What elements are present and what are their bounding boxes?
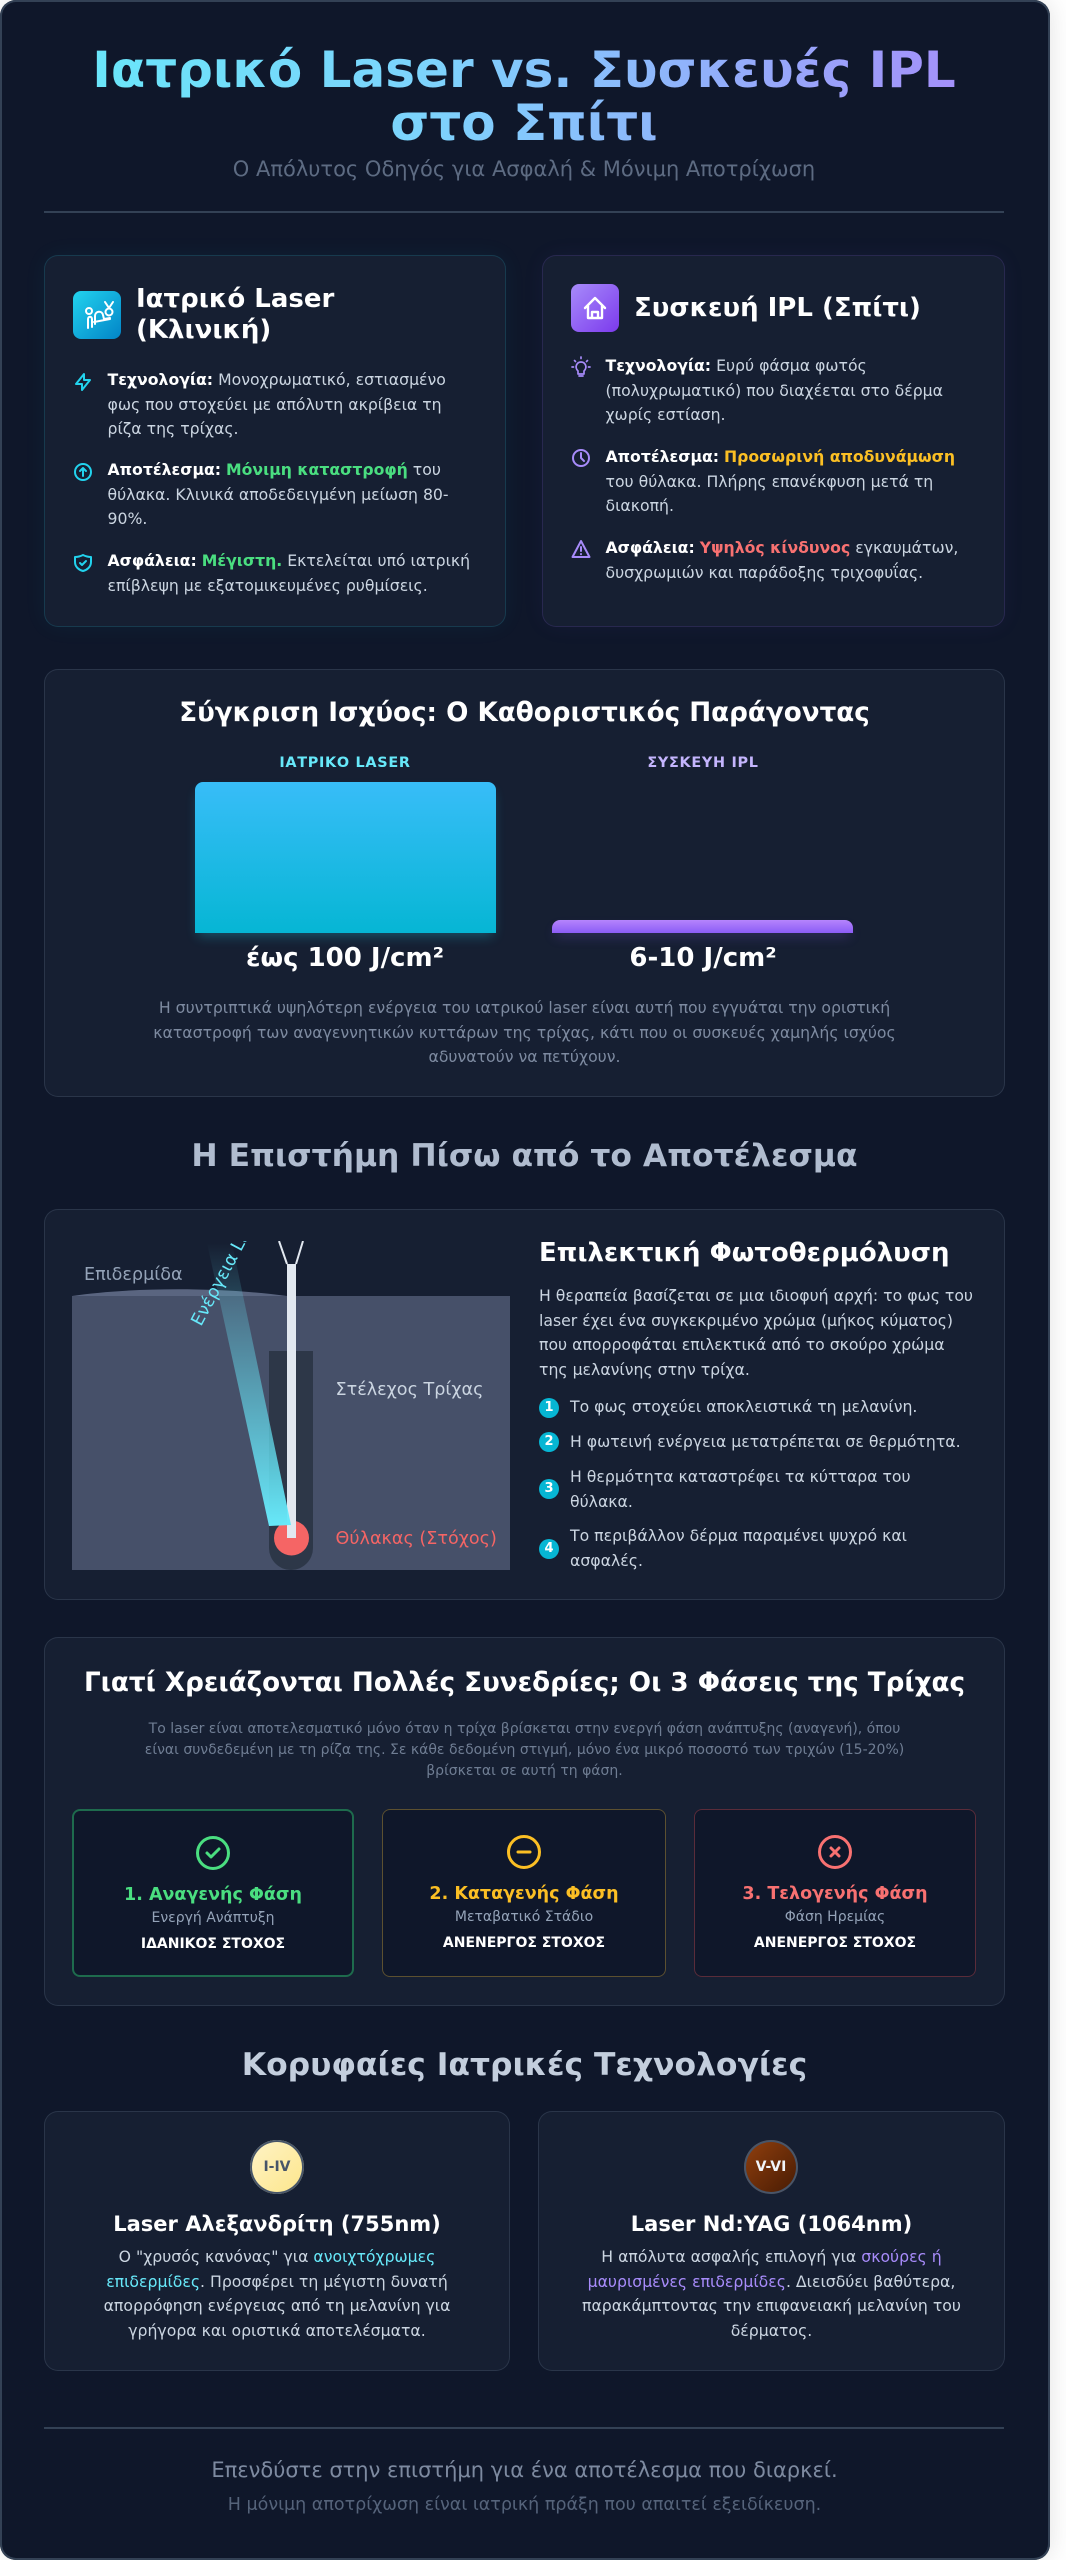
intro text: Το laser είναι αποτελεσματικό μόνο όταν η τρίχα βρίσκεται στην ενεργή φάση ανάπτυξης (αναγενή), όπου [149, 1721, 900, 1737]
step 3 text [570, 1467, 911, 1510]
item: safety: επίβλεψη με εξατομικευμένες ρυθμίσεις. [108, 576, 428, 594]
value: laser: έως 100 J/cm² [246, 943, 444, 973]
icon: bulb [571, 356, 591, 377]
skin badge: I-IV [263, 2159, 291, 2175]
description: παρακάμπτοντας την επιφανειακή μελανίνη του [582, 2296, 961, 2315]
step 1 badge: 1 [544, 1400, 554, 1415]
steps list [539, 1397, 961, 1570]
title: Laser Αλεξανδρίτη (755nm) [113, 2212, 441, 2236]
step 4 text [570, 1526, 907, 1570]
item: safety: Ασφάλεια: Μέγιστη. Εκτελείται υπό ιατρική [108, 551, 470, 570]
skin badge [250, 2140, 304, 2194]
skin [72, 1296, 510, 1570]
phase title: 3. Τελογενής Φάση [742, 1884, 928, 1904]
label: epidermis: Επιδερμίδα [84, 1265, 183, 1285]
skin badge: V-VI [756, 2159, 786, 2175]
step 2 badge: 2 [544, 1434, 554, 1449]
description: επιδερμίδες. Προσφέρει τη μέγιστη δυνατή [106, 2272, 448, 2290]
item: technology [108, 370, 446, 438]
step 3 badge: 3 [544, 1481, 554, 1496]
phase subtitle: Φάση Ηρεμίας [785, 1909, 885, 1925]
heading: Σύγκριση Ισχύος: Ο Καθοριστικός Παράγοντας [179, 698, 870, 728]
hair shaft [287, 1264, 296, 1538]
item: result [108, 460, 449, 528]
panel: medical laser [44, 255, 506, 627]
subtitle: Ο Απόλυτος Οδηγός για Ασφαλή & Μόνιμη Αποτρίχωση [233, 157, 815, 181]
item: result: Αποτέλεσμα: Μόνιμη καταστροφή του [108, 460, 441, 479]
label: laser: ΙΑΤΡΙΚΟ LASER [279, 755, 411, 771]
phase subtitle: Μεταβατικό Στάδιο [455, 1909, 593, 1925]
footer line: Επενδύστε στην επιστήμη για ένα αποτέλεσμα που διαρκεί. [211, 2458, 838, 2482]
title: στο Σπίτι [390, 94, 658, 152]
title: Ιατρικό Laser vs. Συσκευές IPL [92, 41, 956, 99]
icon: cross [818, 1835, 852, 1869]
step 4 text: ασφαλές. [570, 1550, 643, 1570]
heading: science: Η Επιστήμη Πίσω από το Αποτέλεσμα [191, 1138, 858, 1174]
description: Ο "χρυσός κανόνας" για ανοιχτόχρωμες [119, 2247, 435, 2266]
bar: ipl [552, 920, 853, 933]
item: technology: Τεχνολογία: Ευρύ φάσμα φωτός [606, 356, 867, 375]
explanation: Η συντριπτικά υψηλότερη ενέργεια του ιατρικού laser είναι αυτή που εγγυάται την οριστική [159, 998, 890, 1017]
panel: power comparison [44, 669, 1005, 1097]
heading: Ιατρικό Laser [136, 284, 334, 314]
intro text: είναι συνδεδεμένη με τη ρίζα της. Σε κάθε δεδομένη στιγμή, μόνο ένα μικρό ποσοστό των τριχών (15-20%) [145, 1742, 904, 1758]
item: technology: χωρίς εστίαση. [606, 405, 726, 424]
phase 2 card [382, 1809, 666, 1977]
icon: minus [507, 1835, 541, 1869]
intro text [145, 1721, 904, 1779]
explanation: καταστροφή των αναγεννητικών κυττάρων της τρίχας, κάτι που οι συσκευές χαμηλής ισχύος [153, 1022, 896, 1042]
heading: (Κλινική) [136, 315, 271, 345]
step 2 text: Η φωτεινή ενέργεια μετατρέπεται σε θερμότητα. [570, 1432, 961, 1451]
phase status: ΑΝΕΝΕΡΓΟΣ ΣΤΟΧΟΣ [443, 1935, 605, 1951]
label: ipl: ΣΥΣΚΕΥΗ IPL [647, 755, 759, 771]
phase status: ΙΔΑΝΙΚΟΣ ΣΤΟΧΟΣ [141, 1936, 285, 1952]
step 3 badge [539, 1479, 559, 1499]
title: Laser Nd:YAG (1064nm) [631, 2212, 912, 2236]
description: Η απόλυτα ασφαλής επιλογή για σκούρες ή [601, 2247, 942, 2266]
phase status: ΑΝΕΝΕΡΓΟΣ ΣΤΟΧΟΣ [754, 1935, 916, 1951]
icon: shield [74, 554, 92, 572]
footer note: Η μόνιμη αποτρίχωση είναι ιατρική πράξη που απαιτεί εξειδίκευση. [228, 2495, 821, 2515]
follicle [269, 1351, 313, 1570]
description: γρήγορα και οριστικά αποτελέσματα. [128, 2320, 426, 2340]
explanation [153, 998, 896, 1066]
panel: hair phases [44, 1637, 1005, 2006]
icon: check [196, 1836, 230, 1870]
target bulb [274, 1520, 309, 1556]
heading: technologies: Κορυφαίες Ιατρικές Τεχνολογίες [242, 2047, 807, 2083]
phase 1 card [72, 1809, 354, 1977]
item: result: θύλακα. Κλινικά αποδεδειγμένη μείωση 80- [108, 484, 449, 504]
heading: Συσκευή IPL (Σπίτι) [634, 293, 921, 323]
item: technology: φως που στοχεύει με απόλυτη ακρίβεια τη [108, 394, 442, 414]
heading: Γιατί Χρειάζονται Πολλές Συνεδρίες; Οι 3 Φάσεις της Τρίχας [84, 1668, 965, 1698]
phase title: 1. Αναγενής Φάση [124, 1885, 302, 1905]
label: shaft: Στέλεχος Τρίχας [336, 1380, 483, 1400]
item: safety [606, 538, 958, 582]
panel: selective photothermolysis [44, 1209, 1005, 1600]
description: μαυρισμένες επιδερμίδες. Διεισδύει βαθύτερα, [588, 2272, 955, 2290]
panel: Nd:YAG [538, 2111, 1005, 2371]
item: technology: (πολυχρωματικό) που διαχέεται στο δέρμα [606, 380, 943, 400]
value: ipl: 6-10 J/cm² [629, 943, 777, 973]
text block: Η θεραπεία βασίζεται σε μια ιδιοφυή αρχή: το φως του [539, 1286, 973, 1305]
item: technology: ρίζα της τρίχας. [108, 419, 239, 438]
skin badge [744, 2140, 798, 2194]
item: result: διακοπή. [606, 496, 674, 515]
item: result: Αποτέλεσμα: Προσωρινή αποδυνάμωση [606, 447, 955, 466]
step 3 text: θύλακα. [570, 1492, 633, 1510]
panel: alexandrite [44, 2111, 510, 2371]
bar: laser [194, 782, 496, 933]
icon: clock [572, 449, 590, 467]
text block: που απορροφάται επιλεκτικά από το σκούρο χρώμα [539, 1335, 945, 1354]
phase subtitle: Ενεργή Ανάπτυξη [152, 1910, 274, 1926]
hair tip [279, 1241, 303, 1264]
icon: house [571, 284, 619, 332]
intro text: βρίσκεται σε αυτή τη φάση. [426, 1763, 623, 1779]
heading [136, 284, 334, 345]
item: technology: Τεχνολογία: Μονοχρωματικό, εστιασμένο [108, 370, 446, 389]
label: follicle: Θύλακας (Στόχος) [336, 1529, 497, 1549]
step 1 badge [539, 1398, 559, 1418]
text block: της μελανίνης στην τρίχα. [539, 1360, 750, 1378]
heading: Επιλεκτική Φωτοθερμόλυση [539, 1238, 949, 1268]
step 4 badge [539, 1539, 559, 1559]
step 4 text: Το περιβάλλον δέρμα παραμένει ψυχρό και [570, 1526, 907, 1545]
description [582, 2247, 961, 2340]
laser beam [207, 1243, 291, 1526]
step 4 badge: 4 [544, 1541, 554, 1556]
description: δέρματος. [731, 2320, 812, 2340]
icon: laser [73, 291, 121, 339]
item: result: 90%. [108, 509, 147, 528]
text block: laser έχει ένα συγκεκριμένο χρώμα (μήκος κύματος) [539, 1310, 953, 1330]
description: απορρόφηση ενέργειας από τη μελανίνη για [104, 2296, 450, 2315]
phase 3 card [694, 1809, 976, 1977]
step 1 text: Το φως στοχεύει αποκλειστικά τη μελανίνη. [570, 1397, 917, 1416]
item: safety [108, 551, 470, 594]
phase title: 2. Καταγενής Φάση [429, 1884, 619, 1904]
item: result: του θύλακα. Πλήρης επανέκφυση μετά τη [606, 472, 933, 490]
bar chart [192, 755, 853, 973]
icon: warning [572, 540, 590, 558]
panel: IPL device [542, 255, 1005, 627]
diagram: hair follicle [72, 1241, 510, 1570]
explanation: αδυνατούν να πετύχουν. [428, 1047, 620, 1066]
title [44, 44, 1004, 149]
text block [539, 1286, 973, 1378]
item: safety: δυσχρωμιών και παράδοξης τριχοφυΐας. [606, 562, 923, 582]
icon: arrow up circle [74, 463, 92, 481]
item: safety: Ασφάλεια: Υψηλός κίνδυνος εγκαυμάτων, [606, 538, 958, 557]
item: technology [606, 356, 943, 424]
icon: bolt [75, 373, 91, 391]
step 3 text: Η θερμότητα καταστρέφει τα κύτταρα του [570, 1467, 911, 1486]
item: result [606, 447, 955, 515]
description [104, 2247, 450, 2340]
step 2 badge [539, 1432, 559, 1452]
